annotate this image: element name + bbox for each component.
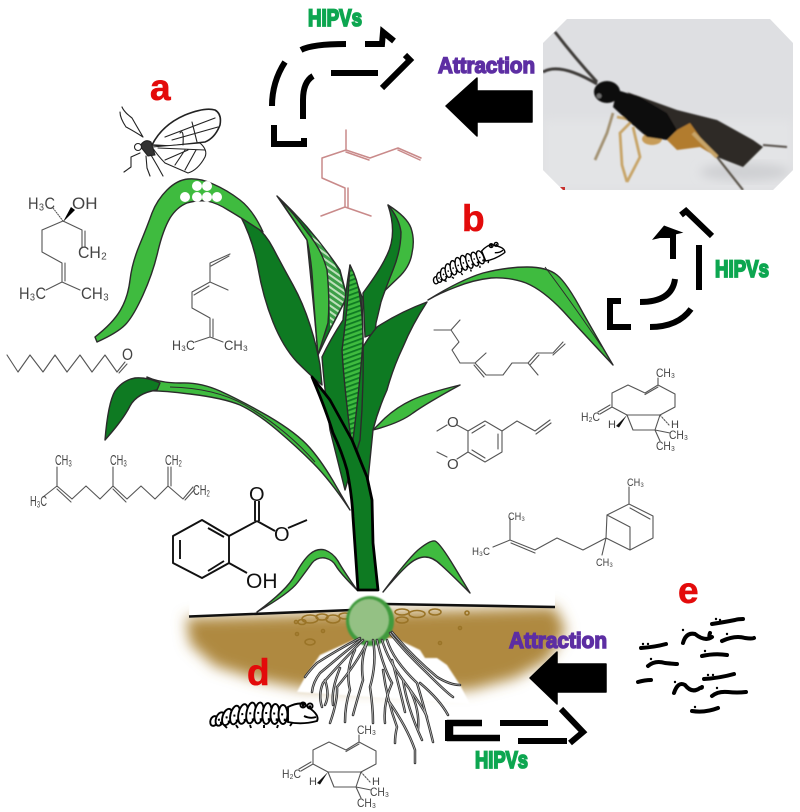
molecule: methyl eugenol: O — [447, 414, 459, 431]
leaf: right upright — [363, 205, 413, 337]
label: Attraction bottom: Attraction — [509, 628, 607, 653]
molecule: bergamotene: CH₃ — [627, 477, 644, 489]
molecule: farnesene: CH₂ — [165, 452, 182, 469]
molecule: beta-farnesene right — [434, 320, 565, 377]
soil surface line — [189, 604, 555, 616]
leaf: lower left small — [257, 550, 357, 612]
heading: HIPVs bottom: HIPVs — [475, 747, 528, 774]
molecule: linalool — [19, 194, 109, 303]
molecule: ocimene: CH₃ — [224, 337, 248, 353]
arrow: HIPVs dashed bottom — [448, 709, 583, 743]
molecule: farnesene — [30, 452, 210, 510]
icon: caterpillar in soil d — [209, 702, 318, 728]
label e: e — [678, 570, 699, 611]
molecule: caryophyllene bottom — [282, 723, 389, 810]
molecule: linalool: CH₂ — [78, 243, 107, 262]
molecule: decanal — [7, 345, 133, 373]
maize plant — [95, 179, 613, 763]
leaf: a, bending left — [95, 179, 322, 385]
heading: HIPVs right: HIPVs — [715, 256, 769, 283]
label a: a — [150, 67, 171, 108]
bulb — [346, 596, 394, 646]
molecule: farnesene: CH₂ — [193, 482, 210, 499]
molecule: methyl eugenol — [437, 414, 551, 473]
molecule: ocimene: H₃C — [172, 337, 195, 353]
nematode eye dots — [642, 618, 728, 708]
molecule: linalool: CH₃ — [81, 284, 109, 303]
molecule: ocimene — [172, 254, 248, 353]
arrow: HIPVs dashed right — [610, 211, 712, 327]
label d: d — [247, 652, 270, 693]
molecule: methyl eugenol: O — [447, 456, 459, 473]
heading: HIPVs top: HIPVs — [308, 5, 362, 32]
leaf: lower left long — [105, 377, 350, 510]
white space above the surface line — [189, 590, 555, 616]
molecule: bergamotene: CH₃ — [596, 557, 613, 569]
icon: butterfly — [120, 107, 220, 176]
molecule: caryophyllene right — [581, 366, 688, 453]
white space beneath the roots — [297, 638, 470, 704]
icon: caterpillar on leaf b — [428, 240, 507, 286]
roots — [305, 632, 460, 763]
molecule: methyl salicylate: OH — [246, 570, 278, 593]
soil particles — [294, 609, 469, 645]
arrow: attraction top — [446, 78, 532, 136]
molecule: methyl salicylate: O — [274, 524, 290, 546]
soil — [186, 590, 566, 704]
molecule: methyl salicylate — [173, 484, 307, 593]
molecule: farnesene: H₃C — [30, 493, 47, 510]
eggs on leaf a — [180, 181, 222, 202]
label c: c — [657, 42, 678, 83]
molecule: bergamotene: CH₃ — [508, 511, 525, 523]
molecule: farnesene: CH₃ — [110, 452, 127, 469]
leaf: lower right small — [383, 541, 470, 593]
molecule: methyl salicylate: O — [249, 484, 265, 506]
molecule: linalool: H₃C — [28, 194, 55, 213]
leaf: right big with leaf b — [350, 267, 613, 480]
leaf: lower right — [373, 385, 460, 430]
leaf: tall middle left — [277, 196, 347, 355]
arrow: HIPVs dashed top — [272, 32, 410, 144]
label b: b — [462, 198, 485, 239]
molecule: bergamotene — [472, 477, 653, 569]
molecule: decanal: O — [122, 345, 133, 364]
stem — [312, 377, 378, 590]
icon: nematodes e — [638, 618, 754, 712]
molecule: linalool: H₃C — [19, 284, 46, 303]
molecule: red farnesene-like structure — [321, 130, 421, 216]
label: Attraction top: Attraction — [438, 53, 535, 78]
molecule: linalool: OH — [72, 194, 98, 213]
leaf: centre — [322, 265, 363, 490]
photo: parasitic wasp c — [543, 19, 793, 191]
molecule: bergamotene: H₃C — [472, 546, 490, 558]
arrow: attraction bottom — [530, 652, 606, 704]
molecule: farnesene: CH₃ — [55, 452, 72, 469]
